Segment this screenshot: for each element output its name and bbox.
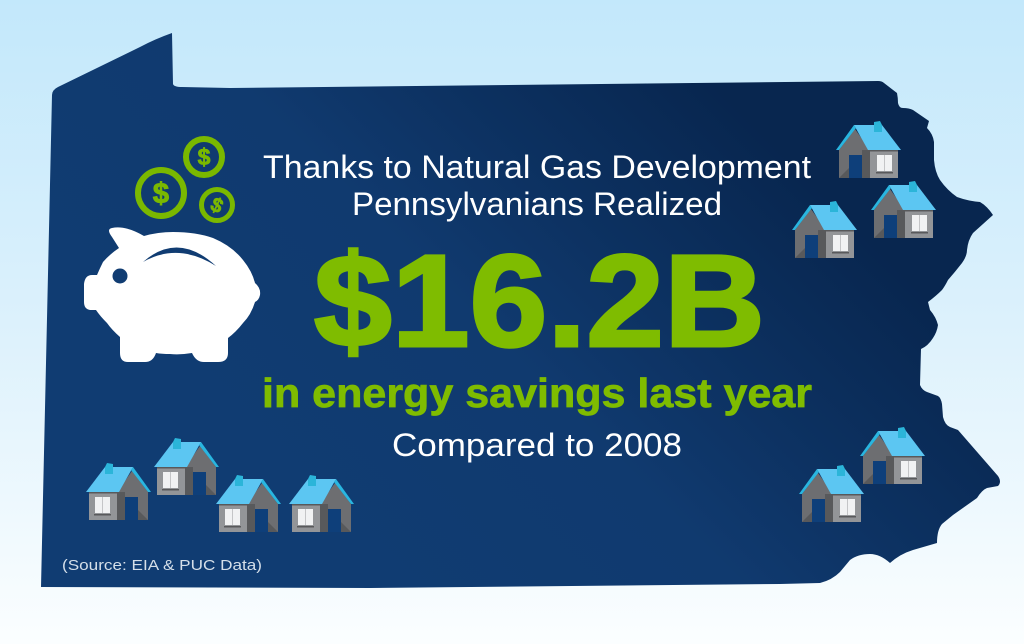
text: comparison year: Compared to 2008 [392,427,682,463]
icon: house southwest second [154,438,219,495]
source note: (Source: EIA & PUC Data) [62,557,262,574]
icon: top dollar coin: $ [198,144,211,170]
icon: top dollar coin [186,139,222,175]
icon: large dollar coin: $ [153,178,169,210]
icon: piggy bank [84,227,260,362]
icon: house northeast left [792,201,857,258]
heading: intro line two: Pennsylvanians Realized [352,186,722,222]
icon: house northeast right [871,181,936,238]
icon: house southwest fourth [289,475,354,532]
heading: intro line one: Thanks to Natural Gas Development [263,149,811,185]
icon: house northeast top [836,121,901,178]
subheading: energy savings: in energy savings last year [262,370,812,416]
icon: tilted dollar coin: $ [207,194,226,218]
icon: house southwest third [216,475,281,532]
icon: house southeast left [799,465,864,522]
big number: savings: $16.2B [314,227,765,374]
icon: house southeast right [860,427,925,484]
icon: large dollar coin [138,170,184,216]
icon: tilted dollar coin [202,190,232,220]
icon: house southwest first [86,463,151,520]
